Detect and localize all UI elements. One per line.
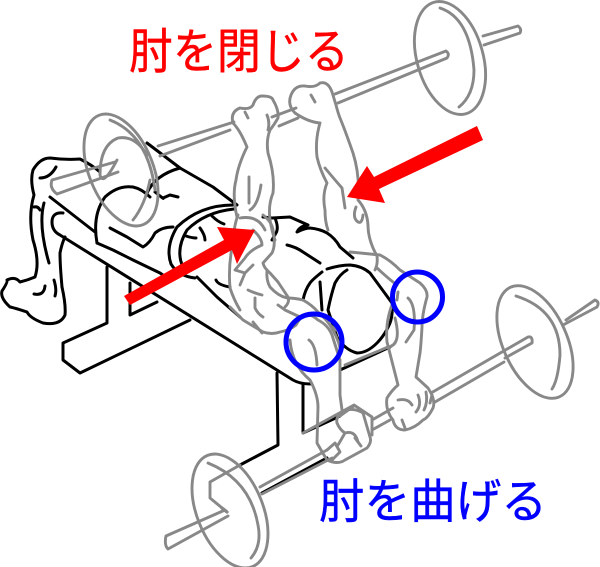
bench <box>50 197 390 512</box>
bottom barbell <box>165 274 598 567</box>
chest muscles <box>229 215 434 430</box>
raised arms <box>232 83 377 270</box>
lower arm and hands <box>290 315 432 462</box>
red arrow pointing to forearm <box>347 126 483 203</box>
blue circle: near elbow <box>286 314 342 370</box>
leg and torso outline <box>2 143 392 353</box>
red arrow pointing to chest <box>124 227 255 305</box>
top barbell <box>51 0 521 237</box>
blue circle: far elbow <box>392 272 442 322</box>
red title: close the elbows: 肘を閉じる <box>129 24 349 78</box>
blue title: bend the elbows: 肘を曲げる <box>319 475 547 528</box>
